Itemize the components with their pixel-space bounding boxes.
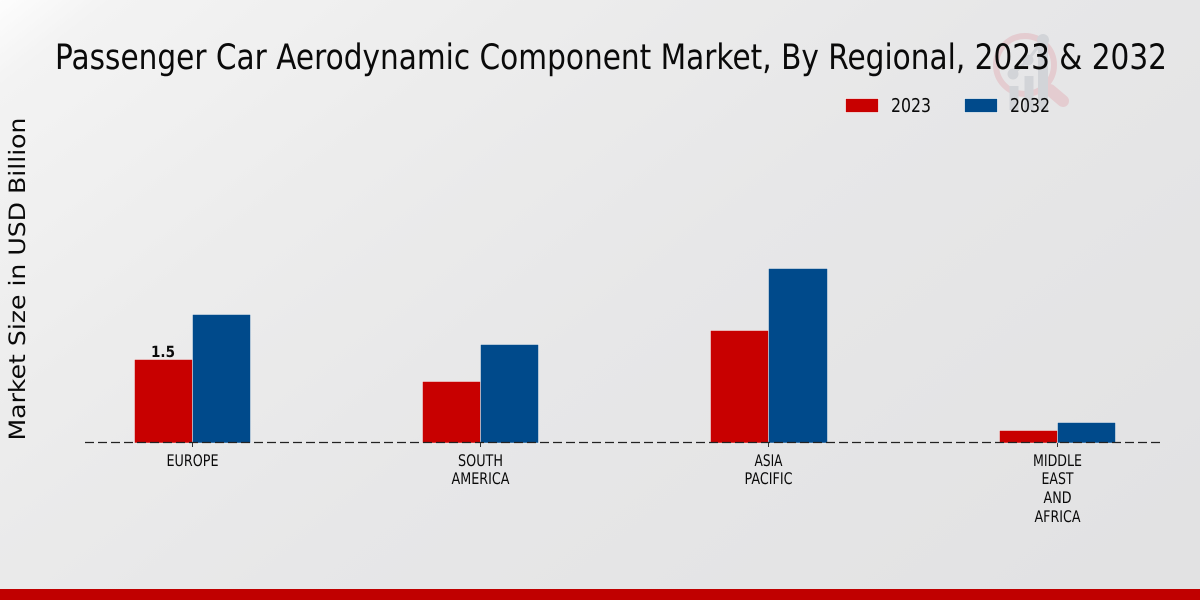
x label: Middle East and Africa: MIDDLE xyxy=(1033,451,1082,470)
bars: Middle East and Africa xyxy=(1000,422,1116,443)
legend item: 2023: 2023 xyxy=(891,95,931,117)
bars: South America xyxy=(422,344,538,443)
x label: South America: SOUTH xyxy=(458,451,503,470)
x label: Middle East and Africa xyxy=(1033,451,1082,526)
x label: Middle East and Africa: AFRICA xyxy=(1034,507,1081,526)
x label: Asia Pacific: ASIA xyxy=(754,451,783,470)
x label: Europe: EUROPE xyxy=(166,451,218,470)
value label: 1.5: 1.5 xyxy=(151,343,175,361)
x label: South America xyxy=(452,451,510,488)
footer bar xyxy=(0,589,1200,600)
legend item: 2032 xyxy=(964,95,1050,117)
x label: Asia Pacific xyxy=(744,451,792,488)
bars: Asia Pacific xyxy=(710,268,828,443)
x label: Middle East and Africa: EAST xyxy=(1042,469,1074,488)
icon: watermark magnifier with bars xyxy=(996,34,1063,110)
x label: South America: AMERICA xyxy=(452,469,510,488)
y axis label: Market Size in USD Billion xyxy=(5,118,31,440)
x label: Middle East and Africa: AND xyxy=(1044,488,1072,507)
legend item: 2023 xyxy=(846,95,931,117)
x axis baseline xyxy=(85,442,1164,444)
bars: Europe xyxy=(134,314,250,443)
x label: Asia Pacific: PACIFIC xyxy=(744,469,792,488)
legend item: 2032: 2032 xyxy=(1010,95,1050,117)
bar chart xyxy=(85,268,1164,447)
legend xyxy=(846,95,1050,117)
